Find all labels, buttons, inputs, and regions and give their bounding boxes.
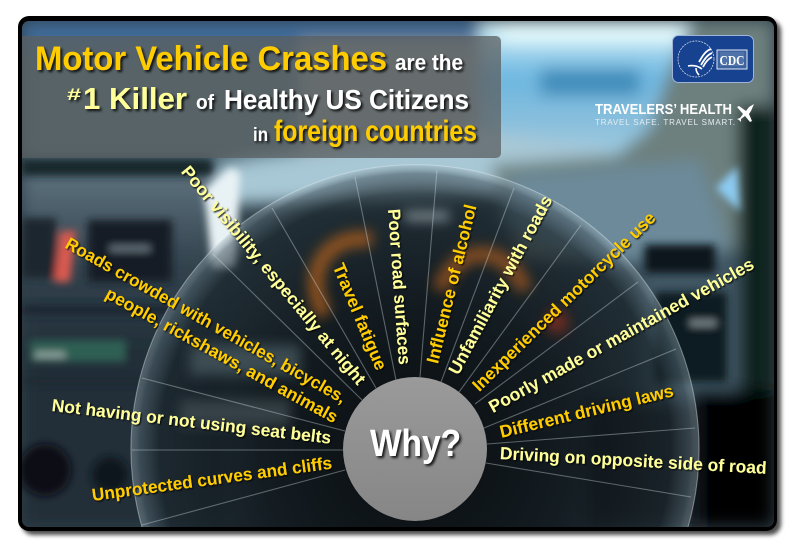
label: Poorly made or maintained vehicles: Poorly made or maintained vehicles: [485, 254, 757, 417]
CDC logo: [672, 36, 754, 82]
title text: [35, 40, 477, 148]
icon: HHS eagle seal: [678, 41, 714, 77]
label: Roads crowded, two lines: people, rickshaws, and animals: [102, 283, 342, 427]
Travelers' Health logo: TRAVEL SAFE. TRAVEL SMART.: [595, 118, 735, 127]
title text: of: [196, 92, 214, 114]
label: Inexperienced motorcycle use: Inexperienced motorcycle use: [468, 207, 660, 395]
label: Travel fatigue: Travel fatigue: [329, 260, 391, 373]
label: Unfamiliarity with roads: Unfamiliarity with roads: [444, 192, 556, 378]
label: Poor visibility: Poor visibility, especially at night: [177, 162, 370, 389]
center hub: [343, 377, 487, 521]
label: Roads crowded, two lines: Roads crowded with vehicles, bicycles,: [62, 233, 350, 407]
label: Poor road surfaces: Poor road surfaces: [384, 208, 415, 366]
label: Unprotected curves and cliffs: Unprotected curves and cliffs: [91, 453, 333, 505]
title text: #: [67, 85, 82, 104]
title text: foreign countries: [274, 115, 477, 148]
wheel: spoked fan of causes: [131, 165, 699, 527]
label: Driving on opposite side of road: Driving on opposite side of road: [499, 443, 767, 478]
label: Not having or not using seat belts: Not having or not using seat belts: [51, 395, 333, 448]
Travelers' Health logo: TRAVELERS’ HEALTH: [595, 101, 732, 118]
title text: Healthy US Citizens: [224, 84, 469, 115]
title panel: [22, 36, 501, 158]
hub label: Why?: Why?: [370, 423, 461, 465]
title text: are the: [395, 50, 463, 75]
icon: airplane: [737, 104, 754, 122]
title text: 1 Killer: [83, 81, 187, 116]
label: Influence of alcohol: Influence of alcohol: [422, 202, 481, 365]
label: Different driving laws: Different driving laws: [498, 380, 676, 442]
Travelers' Health logo: [595, 101, 754, 127]
title text: Motor Vehicle Crashes: [35, 40, 387, 78]
CDC box: CDC: [720, 54, 744, 69]
title text: in: [253, 125, 268, 146]
